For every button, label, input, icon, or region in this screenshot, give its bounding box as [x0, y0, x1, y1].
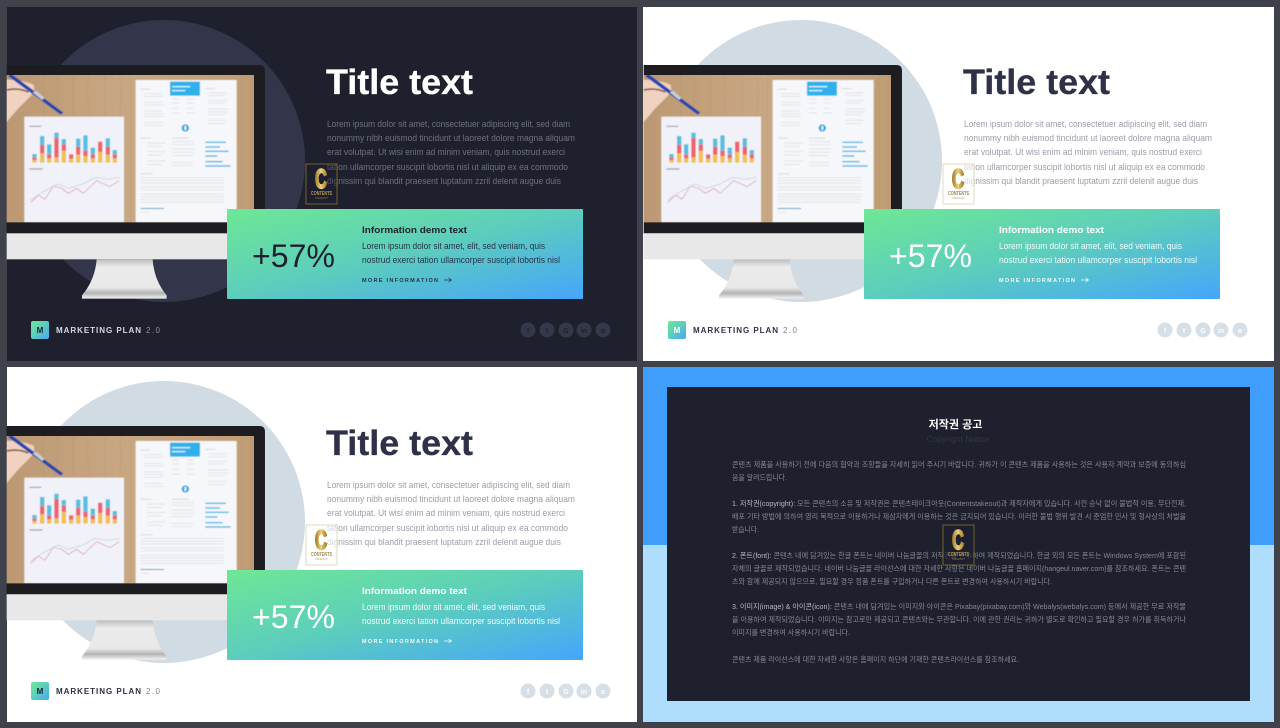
watermark badge: CONTENTS: [311, 191, 333, 197]
title: Title text: [963, 63, 1110, 102]
social icons: f: [1164, 328, 1167, 335]
card text: Lorem ipsum dolor sit amet, elit, sed veniam, quis: [362, 241, 545, 252]
body paragraph: tation ullamcorper suscipit lobortis nisl ut aliquip ex ea commodo: [327, 162, 568, 173]
watermark badge: CONTENTS: [948, 552, 970, 558]
footer logo: M: [37, 687, 44, 696]
body paragraph: nonummy nibh euismod tincidunt ut laoreet dolore magna aliquam: [327, 494, 575, 505]
footer logo: M: [37, 326, 44, 335]
watermark badge: [306, 525, 337, 565]
stat number: +57%: [252, 599, 335, 635]
card text: [362, 602, 560, 627]
social icons: in: [1218, 328, 1224, 335]
watermark badge: TAKEOUT: [315, 557, 328, 561]
notice body text: 콘텐츠 제품을 사용하기 전에 다음의 협약과 조항들을 자세히 읽어 주시기 바랍니다. 귀하가 이 콘텐츠 제품을 사용하는 것은 사용자 계약과 보증에 동의하심: [732, 459, 1186, 469]
social icons: t: [1183, 328, 1186, 335]
slide 3: light theme, dark logo: [0, 367, 637, 722]
notice body text: 배포 기타 방법에 의하여 영리 목적으로 이용하거나 제삼자에게 이용하는 것은 금지되어 있습니다. 이러한 불법 행위 발견 시 준엄한 민사 및 형사상의 처벌을: [732, 511, 1186, 521]
card text: Lorem ipsum dolor sit amet, elit, sed veniam, quis: [999, 241, 1182, 252]
notice panel: [667, 387, 1250, 701]
icon: arrow: [444, 278, 452, 282]
notice body text: 음을 알려드립니다.: [732, 472, 787, 482]
slide 4: copyright notice: [643, 367, 1274, 722]
background circle: [23, 381, 305, 663]
watermark badge: TAKEOUT: [952, 196, 965, 200]
notice body text: 3. 이미지(image) & 아이콘(icon): 콘텐츠 내에 담겨있는 이미지와 아이콘은 Pixabay(pixabay.com)와 Webalys(webalys.com) 등에서 제공한 무료 저작물: [732, 601, 1186, 611]
watermark badge: TAKEOUT: [315, 196, 328, 200]
social icons: o: [1238, 328, 1242, 335]
watermark badge: C: [952, 164, 964, 194]
watermark badge: [943, 525, 974, 565]
stat card: [227, 570, 583, 660]
footer logo: 2.0: [146, 326, 161, 335]
card text: [999, 241, 1197, 266]
footer logo: 2.0: [783, 326, 798, 335]
more information link: MORE INFORMATION: [362, 278, 438, 284]
footer logo: 2.0: [146, 687, 161, 696]
card text: nostrud exerci tation ullamcorper suscipit lobortis nisl: [362, 255, 560, 266]
more information link: MORE INFORMATION: [362, 639, 438, 645]
watermark badge: C: [952, 525, 964, 555]
social icons: in: [581, 328, 587, 335]
watermark badge: [306, 164, 337, 204]
notice body text: 츠와 함께 제공되지 않으므로, 필요할 경우 정품 폰트를 구입하거나 다른 폰트로 변경하여 사용하시기 바랍니다.: [732, 576, 1052, 586]
monitor with dashboard photo: [637, 65, 902, 299]
body paragraph: nonummy nibh euismod tincidunt ut laoreet dolore magna aliquam: [964, 133, 1212, 144]
title: Title text: [326, 63, 473, 102]
more information link: MORE INFORMATION: [999, 278, 1075, 284]
icon: arrow: [444, 639, 452, 643]
slide 1: dark theme: [0, 7, 637, 361]
stat card: [864, 209, 1220, 299]
footer logo: MARKETING PLAN: [56, 326, 141, 335]
title: Title text: [326, 424, 473, 463]
body paragraph: [964, 119, 1212, 187]
body paragraph: Lorem ipsum dolor sit amet, consectetuer adipiscing elit, sed diam: [327, 119, 570, 130]
footer logo: [668, 321, 798, 339]
footer logo: MARKETING PLAN: [56, 687, 141, 696]
monitor with dashboard photo: [0, 426, 265, 660]
body paragraph: [327, 119, 575, 187]
body paragraph: dignissim qui blandit praesent luptatum zzril delenit augue duis: [327, 176, 561, 187]
background circle: [23, 20, 305, 302]
stat number: +57%: [889, 238, 972, 274]
footer logo: MARKETING PLAN: [693, 326, 778, 335]
social icons: [520, 322, 610, 338]
card heading: Information demo text: [362, 586, 468, 597]
card heading: Information demo text: [999, 225, 1105, 236]
social icons: t: [546, 328, 549, 335]
footer logo: [31, 321, 161, 339]
stat card: [227, 209, 583, 299]
card heading: Information demo text: [362, 225, 468, 236]
body paragraph: erat volutpat. Ut wisi enim ad minim veniam, quis nostrud exerci: [964, 147, 1202, 158]
body paragraph: tation ullamcorper suscipit lobortis nisl ut aliquip ex ea commodo: [964, 162, 1205, 173]
body paragraph: nonummy nibh euismod tincidunt ut laoreet dolore magna aliquam: [327, 133, 575, 144]
social icons: o: [601, 328, 605, 335]
body paragraph: erat volutpat. Ut wisi enim ad minim veniam, quis nostrud exerci: [327, 508, 565, 519]
notice body text: 이미지를 변경하여 사용하시기 바랍니다.: [732, 627, 850, 637]
social icons: o: [601, 689, 605, 696]
watermark badge: [943, 164, 974, 204]
body paragraph: tation ullamcorper suscipit lobortis nisl ut aliquip ex ea commodo: [327, 523, 568, 534]
social icons: t: [546, 689, 549, 696]
notice body text: 1. 저작권(copyright): 모든 콘텐츠의 소유 및 저작권은 콘텐츠테이크아웃(Contentstakeout)과 제작자에게 있습니다. 사전 승낙 없이 불법적 이용, 무단전재,: [732, 498, 1186, 508]
body paragraph: erat volutpat. Ut wisi enim ad minim veniam, quis nostrud exerci: [327, 147, 565, 158]
social icons: [520, 684, 610, 698]
watermark badge: CONTENTS: [948, 191, 970, 197]
notice heading: 저작권 공고: [929, 417, 982, 431]
social icons: [1158, 322, 1248, 338]
notice body text: 을 이용하여 제작되었습니다. 이미지는 참고로만 제공되고 콘텐츠와는 무관합니다. 이에 관한 권리는 귀하가 별도로 확인하고 필요할 경우 허가를 취득하거나: [732, 614, 1186, 624]
notice body text: 2. 폰트(font): 콘텐츠 내에 담겨있는 한글 폰트는 네이버 나눔글꼴의 저작권을 준수하여 제작되었습니다. 한글 외의 모든 폰트는 Windows System에 포함된: [732, 550, 1186, 560]
social icons: G: [1200, 328, 1206, 335]
body paragraph: dignissim qui blandit praesent luptatum zzril delenit augue duis: [327, 537, 561, 548]
monitor with dashboard photo: [0, 65, 265, 299]
card text: nostrud exerci tation ullamcorper suscipit lobortis nisl: [362, 616, 560, 627]
notice body text: 자체의 글꼴로 제작되었습니다. 네이버 나눔글꼴 라이선스에 대한 자세한 사항은 네이버 나눔글꼴 홈페이지(hangeul.naver.com)를 참조하세요. 폰트는 콘텐: [732, 563, 1186, 573]
notice body text: [732, 459, 1186, 664]
watermark badge: CONTENTS: [311, 552, 333, 558]
social icons: G: [563, 689, 569, 696]
watermark badge: C: [315, 164, 327, 194]
social icons: G: [563, 328, 569, 335]
body paragraph: Lorem ipsum dolor sit amet, consectetuer adipiscing elit, sed diam: [964, 119, 1207, 130]
watermark badge: C: [315, 525, 327, 555]
body paragraph: Lorem ipsum dolor sit amet, consectetuer adipiscing elit, sed diam: [327, 480, 570, 491]
notice body text: 받습니다.: [732, 524, 759, 534]
card text: nostrud exerci tation ullamcorper suscipit lobortis nisl: [999, 255, 1197, 266]
social icons: f: [527, 689, 530, 696]
social icons: in: [581, 689, 587, 696]
watermark badge: TAKEOUT: [952, 557, 965, 561]
body paragraph: [327, 480, 575, 548]
social icons: f: [527, 328, 530, 335]
footer logo: M: [674, 326, 681, 335]
notice body text: 콘텐츠 제품 라이선스에 대한 자세한 사항은 홈페이지 하단에 기재한 콘텐츠라이선스를 참조하세요.: [732, 654, 1019, 664]
body paragraph: dignissim qui blandit praesent luptatum zzril delenit augue duis: [964, 176, 1198, 187]
card text: Lorem ipsum dolor sit amet, elit, sed veniam, quis: [362, 602, 545, 613]
background circle: [660, 20, 942, 302]
slide 2: light theme, white stat: [637, 7, 1274, 361]
footer logo: [31, 682, 161, 700]
icon: arrow: [1081, 278, 1088, 282]
stat number: +57%: [252, 238, 335, 274]
card text: [362, 241, 560, 266]
notice subheading: Copyright Notice: [927, 434, 990, 444]
